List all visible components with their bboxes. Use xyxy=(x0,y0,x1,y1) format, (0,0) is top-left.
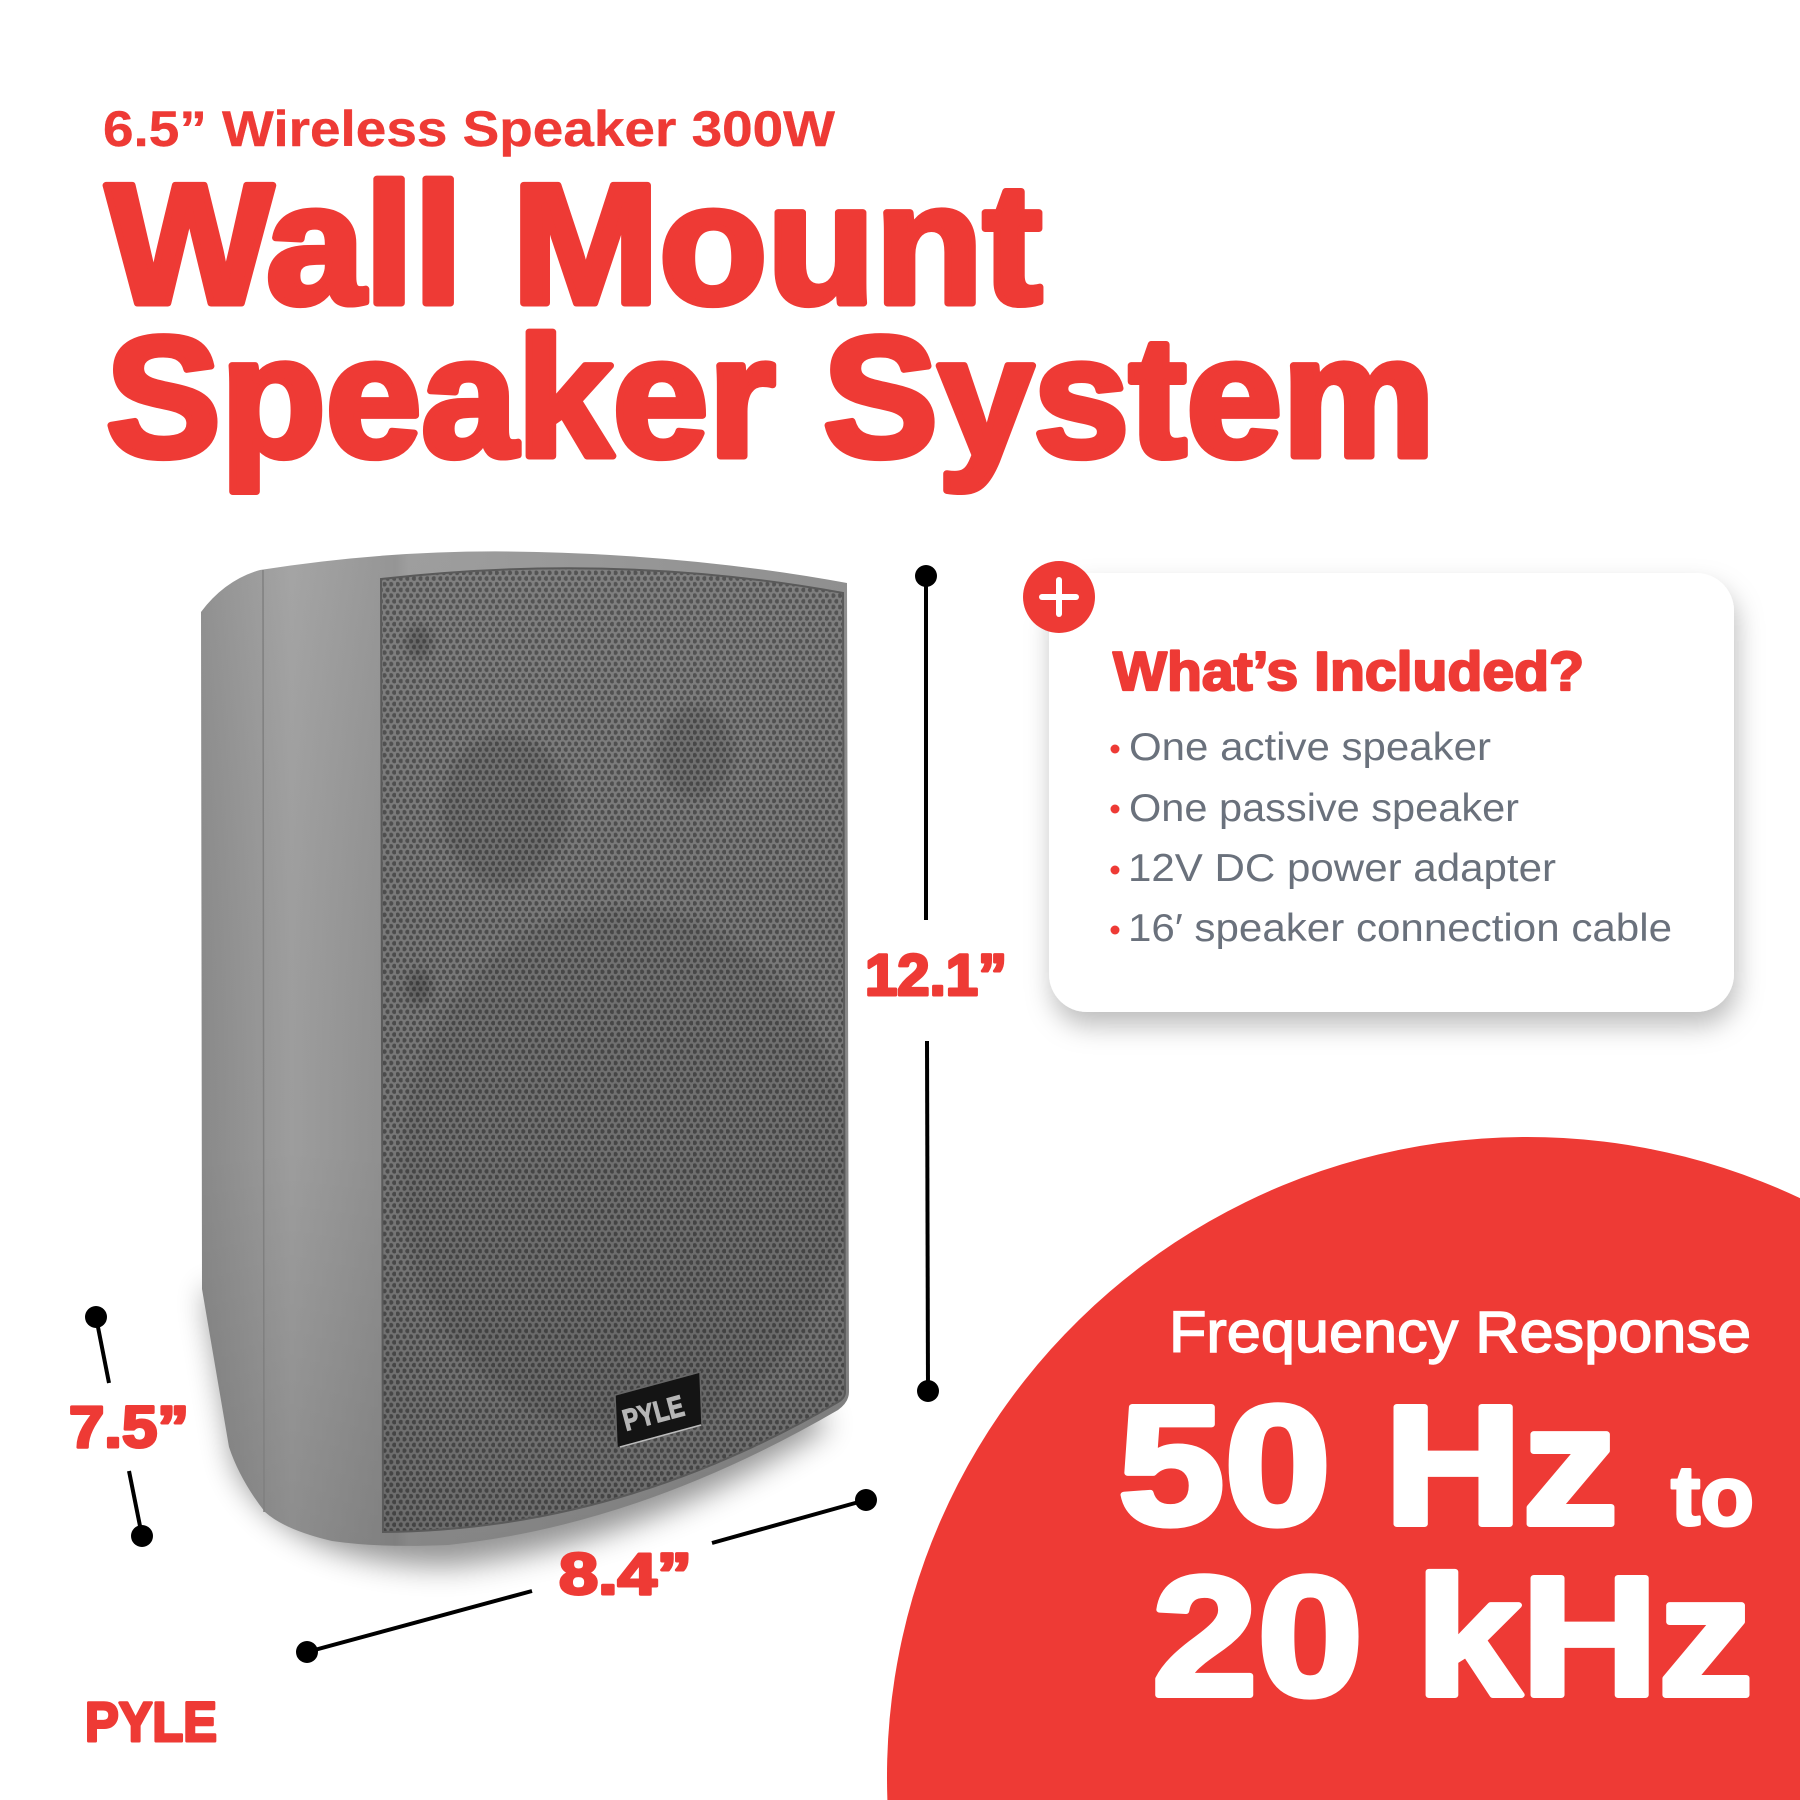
speaker cabinet xyxy=(201,551,849,1546)
list of included items: 16′ speaker connection cable xyxy=(1128,907,1672,950)
small port middle xyxy=(407,971,431,1003)
card heading: What’s Included? xyxy=(1113,640,1584,702)
panel: frequency response xyxy=(887,1137,1800,1800)
speaker badge xyxy=(615,1372,702,1448)
list of included items: 12V DC power adapter xyxy=(1128,847,1556,890)
width label: 8.4” xyxy=(559,1542,692,1607)
frequency value: to xyxy=(1671,1449,1754,1543)
woofer xyxy=(400,908,850,1432)
subtitle: 6.5” Wireless Speaker 300W xyxy=(103,101,836,157)
list of included items: One active speaker xyxy=(1129,726,1491,769)
height dimension xyxy=(865,565,1007,1402)
list of included items: One passive speaker xyxy=(1129,787,1519,830)
depth dimension xyxy=(69,1306,189,1547)
title xyxy=(106,149,1435,493)
frequency value xyxy=(1118,1371,1754,1732)
icon: plus badge xyxy=(1023,561,1095,633)
card background xyxy=(1049,573,1734,1012)
frequency label: Frequency Response xyxy=(1169,1300,1751,1365)
speaker product image xyxy=(201,540,860,1566)
tweeter xyxy=(660,709,730,795)
midrange driver xyxy=(442,734,568,884)
speaker grille xyxy=(382,569,844,1531)
list of included items xyxy=(1110,726,1672,950)
width dimension xyxy=(296,1489,877,1663)
speaker badge: PYLE xyxy=(619,1390,688,1438)
panel: what's included xyxy=(1023,561,1734,1012)
small port top xyxy=(407,626,431,658)
depth label: 7.5” xyxy=(69,1395,189,1460)
brand logo: PYLE xyxy=(85,1690,217,1753)
frequency value: 20 kHz xyxy=(1152,1542,1753,1732)
red circle background xyxy=(887,1137,1800,1800)
title line 1: Wall Mount xyxy=(106,149,1042,340)
speaker shadow xyxy=(205,1290,830,1566)
height label: 12.1” xyxy=(865,943,1007,1008)
frequency value: 50 Hz xyxy=(1118,1371,1618,1561)
title line 2: Speaker System xyxy=(106,302,1435,493)
